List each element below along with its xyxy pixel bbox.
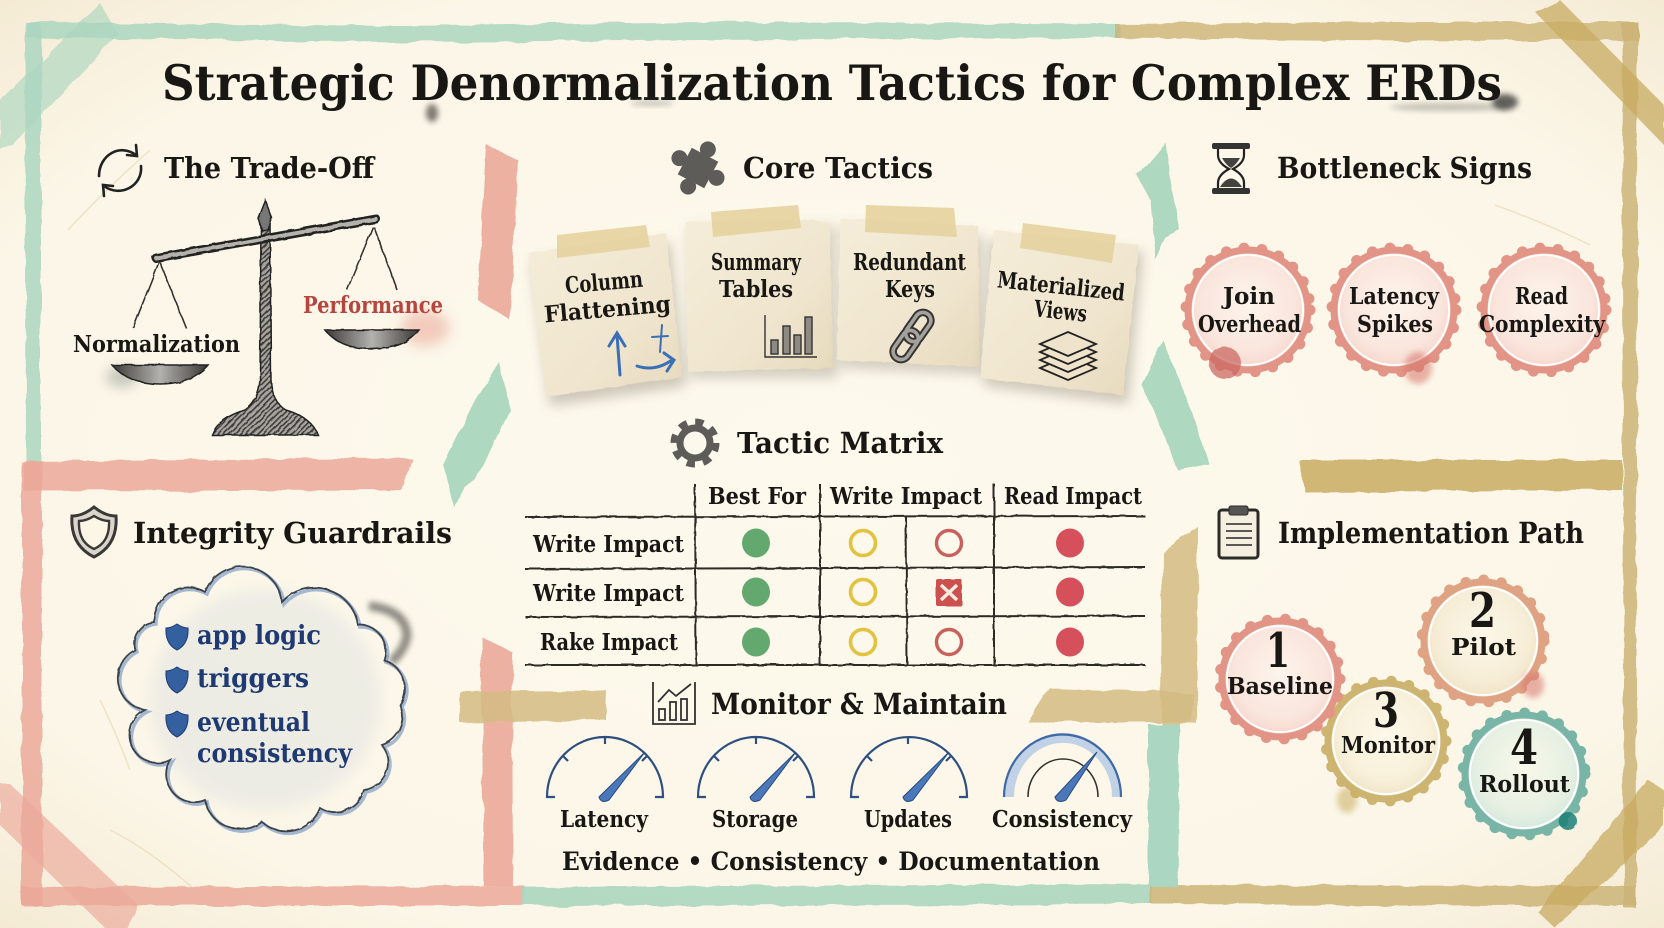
note: redundant keys: Redundant xyxy=(853,249,966,276)
step 2: pilot xyxy=(1422,580,1544,702)
panel: implementation path xyxy=(1219,506,1585,835)
note: redundant keys: Keys xyxy=(885,276,935,303)
seal: latency spikes: Spikes xyxy=(1357,311,1433,338)
divider: green upper right xyxy=(1137,142,1180,260)
frame: left green xyxy=(25,22,41,462)
note: redundant keys xyxy=(837,205,986,375)
gauge: consistency xyxy=(992,734,1133,833)
seal: join overhead: Join xyxy=(1221,283,1275,310)
note: summary tables: Tables xyxy=(719,276,793,303)
panel: core tactics xyxy=(528,129,1143,406)
seal: join overhead: Overhead xyxy=(1198,311,1301,338)
note: summary tables xyxy=(685,205,838,378)
note: materialized views: Materialized xyxy=(996,266,1126,307)
list: app logic: app logic xyxy=(197,621,321,651)
corner tape top-left xyxy=(0,3,118,150)
divider: green vertical lower xyxy=(1148,724,1180,887)
divider: red upper vertical xyxy=(478,144,518,320)
row labels: Write Impact xyxy=(532,580,684,607)
step 4: rollout xyxy=(1463,713,1585,835)
step 2: pilot: Pilot xyxy=(1451,634,1516,661)
list: eventual consistency xyxy=(166,708,353,769)
title: Strategic Denormalization Tactics for Complex ERDs xyxy=(162,54,1502,112)
step 1: baseline: 1 xyxy=(1266,623,1290,679)
heading: The Trade-Off xyxy=(164,151,376,185)
gauge: latency: Latency xyxy=(560,806,649,833)
heading: Implementation Path xyxy=(1278,516,1584,550)
table headers xyxy=(708,483,1142,510)
divider: gold tape left xyxy=(459,691,607,722)
note: summary tables: Summary xyxy=(711,249,801,276)
divider: red lower vertical xyxy=(481,636,513,886)
icon: shield xyxy=(72,507,116,557)
frame: top green xyxy=(27,22,1120,42)
step 4: rollout: 4 xyxy=(1510,720,1538,776)
note: materialized views xyxy=(980,223,1143,404)
seal: read complexity: Complexity xyxy=(1479,311,1606,338)
note: column flattening: Flattening xyxy=(543,290,672,328)
step 1: baseline: Baseline xyxy=(1227,673,1333,700)
corner tape bottom-left xyxy=(0,784,138,928)
icon: refresh arrows xyxy=(99,145,141,196)
heading: Monitor & Maintain xyxy=(711,687,1007,721)
frame: top gold xyxy=(1115,22,1638,41)
step 4: rollout: Rollout xyxy=(1479,771,1570,798)
panel: monitor and maintain xyxy=(547,682,1133,876)
heading: Core Tactics xyxy=(743,151,933,185)
gauge: storage: Storage xyxy=(712,806,798,833)
seal: read complexity xyxy=(1479,248,1606,372)
note: column flattening: Column xyxy=(564,266,644,299)
gauge: updates: Updates xyxy=(864,806,952,833)
icon: hourglass xyxy=(1212,143,1250,194)
seal: latency spikes xyxy=(1332,248,1456,384)
label: performance: Performance xyxy=(303,292,443,319)
gauge: consistency: Consistency xyxy=(992,806,1133,833)
panel: the trade-off xyxy=(73,145,449,435)
seal: read complexity: Read xyxy=(1515,283,1568,310)
table headers: Write Impact xyxy=(829,483,982,510)
seal: join overhead xyxy=(1186,248,1310,379)
heading: Integrity Guardrails xyxy=(133,516,452,550)
table grid xyxy=(525,484,1145,665)
list: eventual consistency: consistency xyxy=(197,739,353,769)
frame: left red xyxy=(22,462,42,905)
icon: gear xyxy=(674,422,716,464)
frame: bottom gold xyxy=(1150,885,1636,906)
panel: integrity guardrails xyxy=(72,507,452,833)
divider: gold horizontal xyxy=(1299,460,1622,492)
divider: gold tape right xyxy=(1028,688,1193,722)
divider: red horizontal xyxy=(24,458,412,491)
step 3: monitor: Monitor xyxy=(1341,732,1436,759)
label: normalization: Normalization xyxy=(73,331,240,358)
heading: Tactic Matrix xyxy=(737,426,944,460)
row labels: Rake Impact xyxy=(540,629,678,656)
list: eventual consistency: eventual xyxy=(197,708,310,738)
footer line: Evidence • Consistency • Documentation xyxy=(562,847,1100,876)
table headers: Read Impact xyxy=(1004,483,1142,510)
frame: bottom red xyxy=(22,886,525,906)
seal: latency spikes: Latency xyxy=(1349,283,1440,310)
paper creases xyxy=(68,150,1590,890)
gauge: storage xyxy=(698,737,814,833)
icon: clipboard xyxy=(1219,506,1258,558)
icon: puzzle piece xyxy=(659,129,737,207)
note: column flattening xyxy=(528,225,686,406)
list: triggers: triggers xyxy=(197,664,309,694)
heading: Bottleneck Signs xyxy=(1277,151,1532,185)
row labels xyxy=(532,531,684,656)
corner tape bottom-right xyxy=(1538,780,1664,928)
icon: chart xyxy=(653,682,695,724)
note: materialized views: Views xyxy=(1032,295,1088,328)
cloud xyxy=(118,567,407,833)
ink smudges xyxy=(426,94,1518,122)
table headers: Best For xyxy=(708,483,807,510)
step 1: baseline xyxy=(1220,619,1340,739)
gauge: updates xyxy=(851,737,967,833)
frame: bottom green xyxy=(522,884,1152,906)
step 2: pilot: 2 xyxy=(1469,583,1496,639)
step 3: monitor: 3 xyxy=(1373,683,1399,739)
gauge: latency xyxy=(547,737,663,833)
panel: bottleneck signs xyxy=(1186,143,1606,384)
status marks xyxy=(742,528,1084,656)
balance scale xyxy=(73,200,449,435)
divider: gold vertical xyxy=(1161,527,1198,724)
divider: green slant xyxy=(443,362,510,506)
frame: right gold xyxy=(1622,22,1638,908)
row labels: Write Impact xyxy=(532,531,684,558)
corner tape top-right xyxy=(1535,0,1664,145)
panel: tactic matrix xyxy=(525,422,1145,665)
divider: green lower right xyxy=(1142,340,1209,470)
step 3: monitor xyxy=(1326,681,1446,813)
